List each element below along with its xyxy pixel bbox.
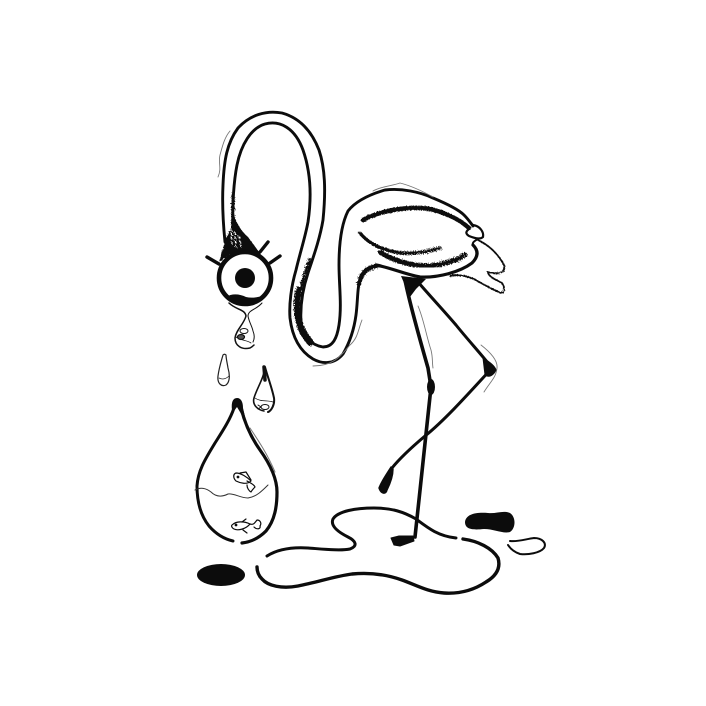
tail feathers xyxy=(450,240,504,293)
neck shading xyxy=(233,195,376,343)
black oval xyxy=(197,564,245,586)
raised foot xyxy=(379,467,393,493)
puddle xyxy=(257,508,499,593)
eye ring xyxy=(219,252,271,304)
neck base xyxy=(219,212,262,262)
small teardrop xyxy=(218,354,229,386)
drop left side xyxy=(197,408,234,541)
belly outline xyxy=(376,245,477,277)
large teardrop xyxy=(195,398,277,543)
small puddle xyxy=(508,538,545,554)
legs xyxy=(379,276,496,546)
neck outer line running into inner U and up to the back xyxy=(223,112,473,347)
raised leg xyxy=(392,282,492,468)
flamingo body xyxy=(360,208,504,293)
eye xyxy=(207,242,280,305)
eyelashes xyxy=(207,242,280,264)
standing foot xyxy=(391,536,414,546)
standing leg xyxy=(405,280,431,537)
neck inner line running into outer U and the belly xyxy=(233,123,380,363)
water line xyxy=(195,485,268,498)
fish upper xyxy=(234,472,255,492)
lower lid xyxy=(226,294,268,305)
head xyxy=(466,225,483,239)
neck lines xyxy=(223,112,473,363)
knee xyxy=(483,358,496,376)
tear under eye xyxy=(229,303,262,349)
fish in medium drop xyxy=(258,404,269,410)
medium teardrop xyxy=(254,367,274,412)
pupil xyxy=(235,268,255,288)
drop tip xyxy=(232,398,247,425)
fish lower xyxy=(232,519,261,533)
gray sketch lines xyxy=(218,131,497,392)
wing lower strokes xyxy=(360,233,440,253)
drop right side xyxy=(241,408,277,543)
black blob by puddle xyxy=(465,512,514,532)
wing upper stroke xyxy=(363,208,469,228)
hip xyxy=(401,276,426,297)
leg joint xyxy=(427,379,435,395)
